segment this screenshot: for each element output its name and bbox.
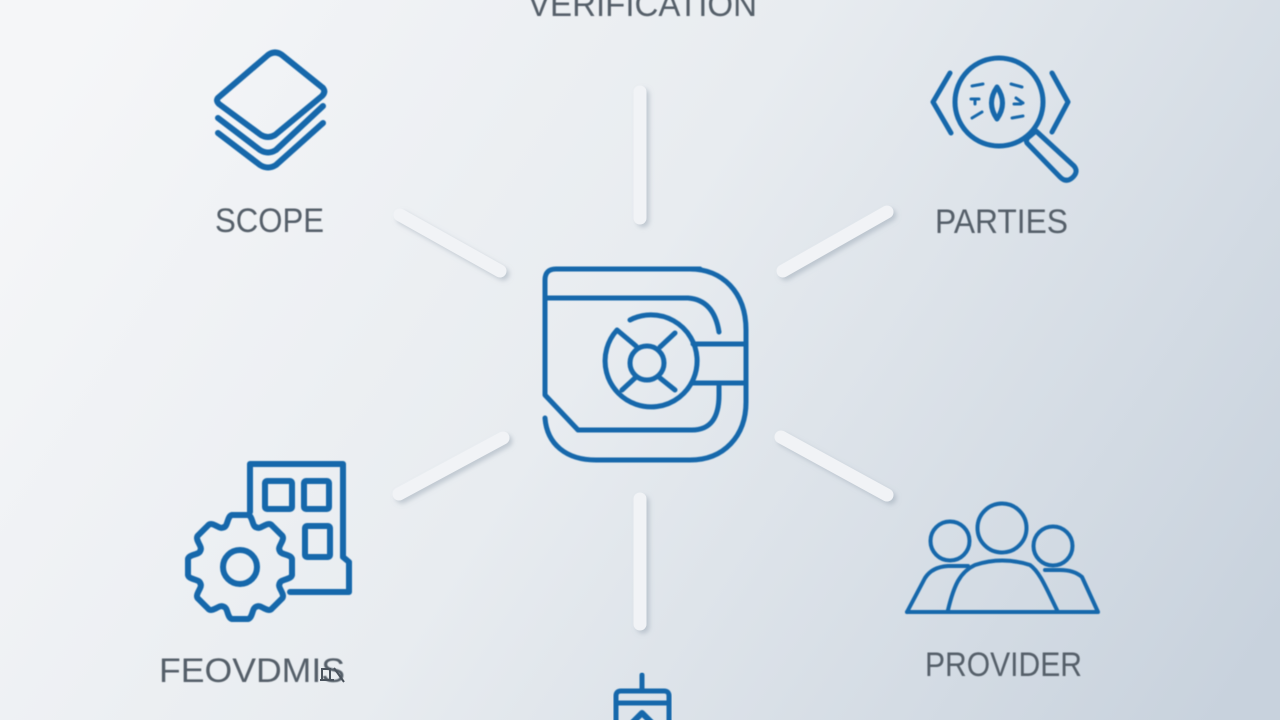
icon: bottom partial — [616, 675, 669, 720]
icon: central vault — [545, 269, 746, 460]
label: scope: SCOPE — [215, 202, 324, 240]
label: feovdmis: FEOVDMIS — [159, 652, 345, 690]
glitch mark over label end — [320, 668, 344, 682]
label: parties: PARTIES — [935, 203, 1068, 241]
icon: scope layers — [217, 52, 324, 168]
label: provider: PROVIDER — [925, 646, 1082, 684]
icon: provider people — [907, 504, 1098, 612]
connectors — [399, 92, 887, 624]
icon: parties magnifier — [933, 58, 1076, 180]
icon: gear and building — [188, 464, 349, 619]
